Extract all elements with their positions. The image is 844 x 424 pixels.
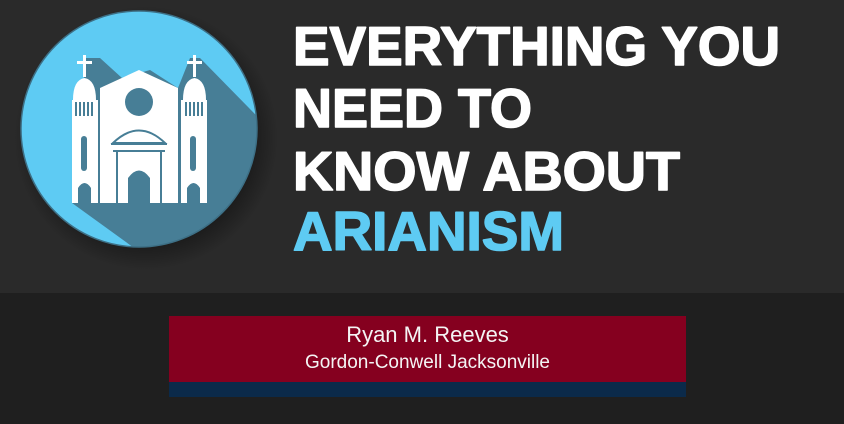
title: [293, 15, 780, 262]
title: ARIANISM: [293, 200, 564, 262]
left tower: [83, 55, 86, 77]
icon: church in circle: [20, 10, 262, 254]
header panel: [0, 0, 844, 293]
title: NEED TO: [293, 77, 532, 139]
center: [100, 70, 178, 203]
institution: Gordon-Conwell Jacksonville: [305, 352, 550, 373]
author name: Ryan M. Reeves: [346, 322, 509, 347]
title: KNOW ABOUT: [293, 140, 680, 202]
author banner: [169, 316, 686, 397]
right tower: [193, 55, 196, 77]
title: EVERYTHING YOU: [293, 15, 780, 77]
